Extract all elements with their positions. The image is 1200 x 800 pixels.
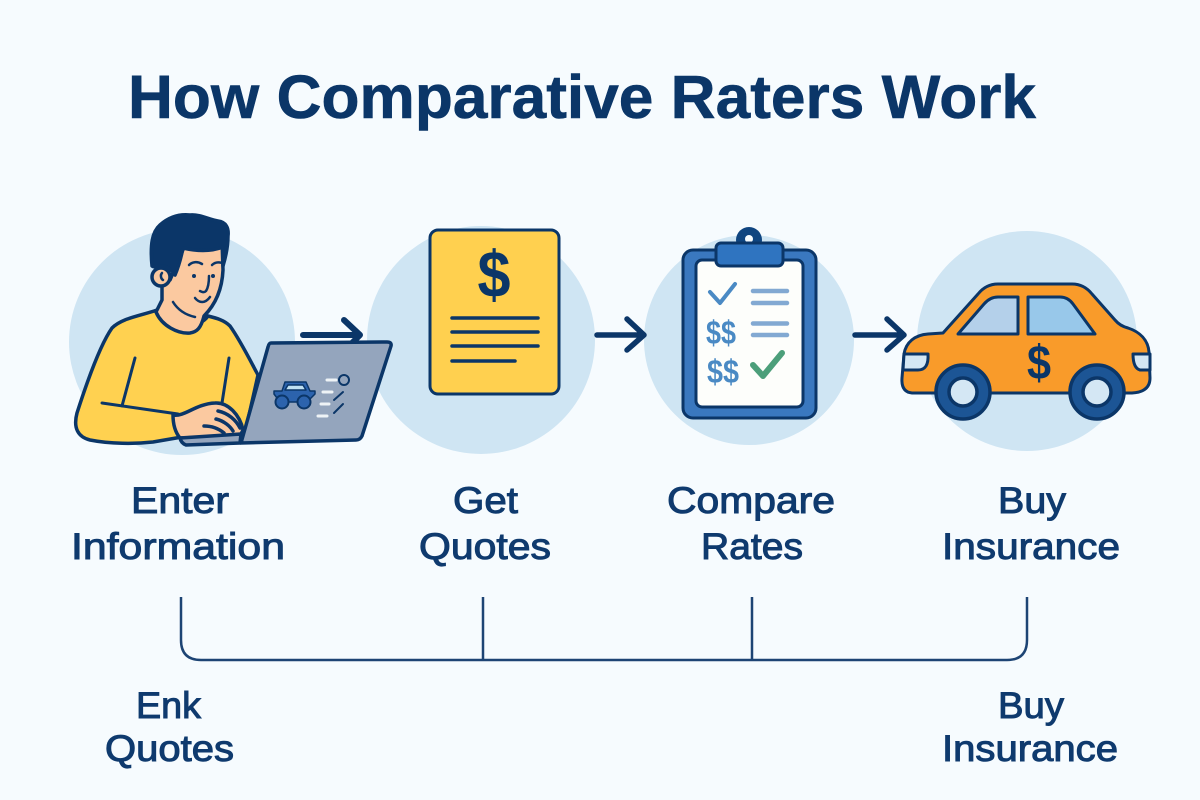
icon: clipboard comparison: [683, 227, 816, 418]
sleeve lines: [102, 358, 229, 414]
sweater: [76, 310, 258, 443]
check mark: [710, 284, 735, 303]
timeline bracket: [181, 597, 1027, 660]
headlight right: [1133, 354, 1150, 370]
title: How Comparative Raters Work: [128, 63, 1036, 131]
step 4 background circle: [917, 231, 1137, 451]
label: Enk Quotes: Quotes: [105, 728, 234, 769]
label: bottom Buy Insurance: Insurance: [942, 728, 1118, 769]
step 3 background circle: [644, 235, 854, 445]
label: Buy Insurance: Buy: [998, 480, 1067, 521]
label: bottom Buy Insurance: [942, 685, 1118, 769]
arrow: step 2 to step 3: [597, 319, 644, 350]
label: Get Quotes: Quotes: [419, 526, 551, 567]
step 1 background circle: [69, 229, 295, 455]
dollar sign: $: [478, 237, 510, 311]
label: Enk Quotes: [105, 685, 234, 769]
facial features: [161, 262, 222, 317]
label: Compare Rates: Rates: [701, 526, 803, 567]
label: Enter Information: Enter: [131, 480, 229, 521]
ear: [152, 268, 170, 286]
arrow: step 1 to step 2: [303, 320, 360, 343]
hair: [151, 215, 228, 275]
label: Enter Information: Information: [71, 526, 285, 567]
windows: [958, 297, 1018, 334]
icon: small car on laptop: [274, 382, 315, 408]
neck and face: [156, 240, 223, 333]
green check mark: [753, 353, 782, 376]
icon: quote document: [430, 230, 559, 394]
label: Enk Quotes: Enk: [136, 685, 202, 726]
laptop screen details: [318, 375, 349, 416]
icon: orange car: [902, 284, 1150, 419]
label: Get Quotes: [419, 480, 551, 567]
clipboard clip: [736, 227, 762, 253]
label: Get Quotes: Get: [453, 480, 519, 521]
fingers: [204, 411, 240, 433]
dollar sign: $: [1027, 337, 1051, 390]
label: Buy Insurance: [942, 480, 1120, 567]
label: Compare Rates: Compare: [667, 480, 835, 521]
wheels: [936, 365, 1124, 419]
list lines: [753, 291, 787, 335]
hand: [173, 403, 243, 438]
laptop screen: [241, 342, 391, 443]
document lines: [452, 318, 538, 361]
laptop base: [180, 434, 241, 445]
headlight left: [903, 354, 928, 370]
arrow: step 3 to step 4: [855, 319, 904, 350]
icon: person using laptop: [76, 215, 391, 445]
dollar signs: $$: [706, 314, 736, 351]
label: Compare Rates: [667, 480, 835, 567]
label: Buy Insurance: Insurance: [942, 526, 1120, 567]
car body: [902, 284, 1150, 393]
label: bottom Buy Insurance: Buy: [998, 685, 1065, 726]
step 2 background circle: [367, 226, 595, 454]
label: Enter Information: [71, 480, 285, 567]
icon: clipboard comparison: $$: [707, 353, 739, 390]
